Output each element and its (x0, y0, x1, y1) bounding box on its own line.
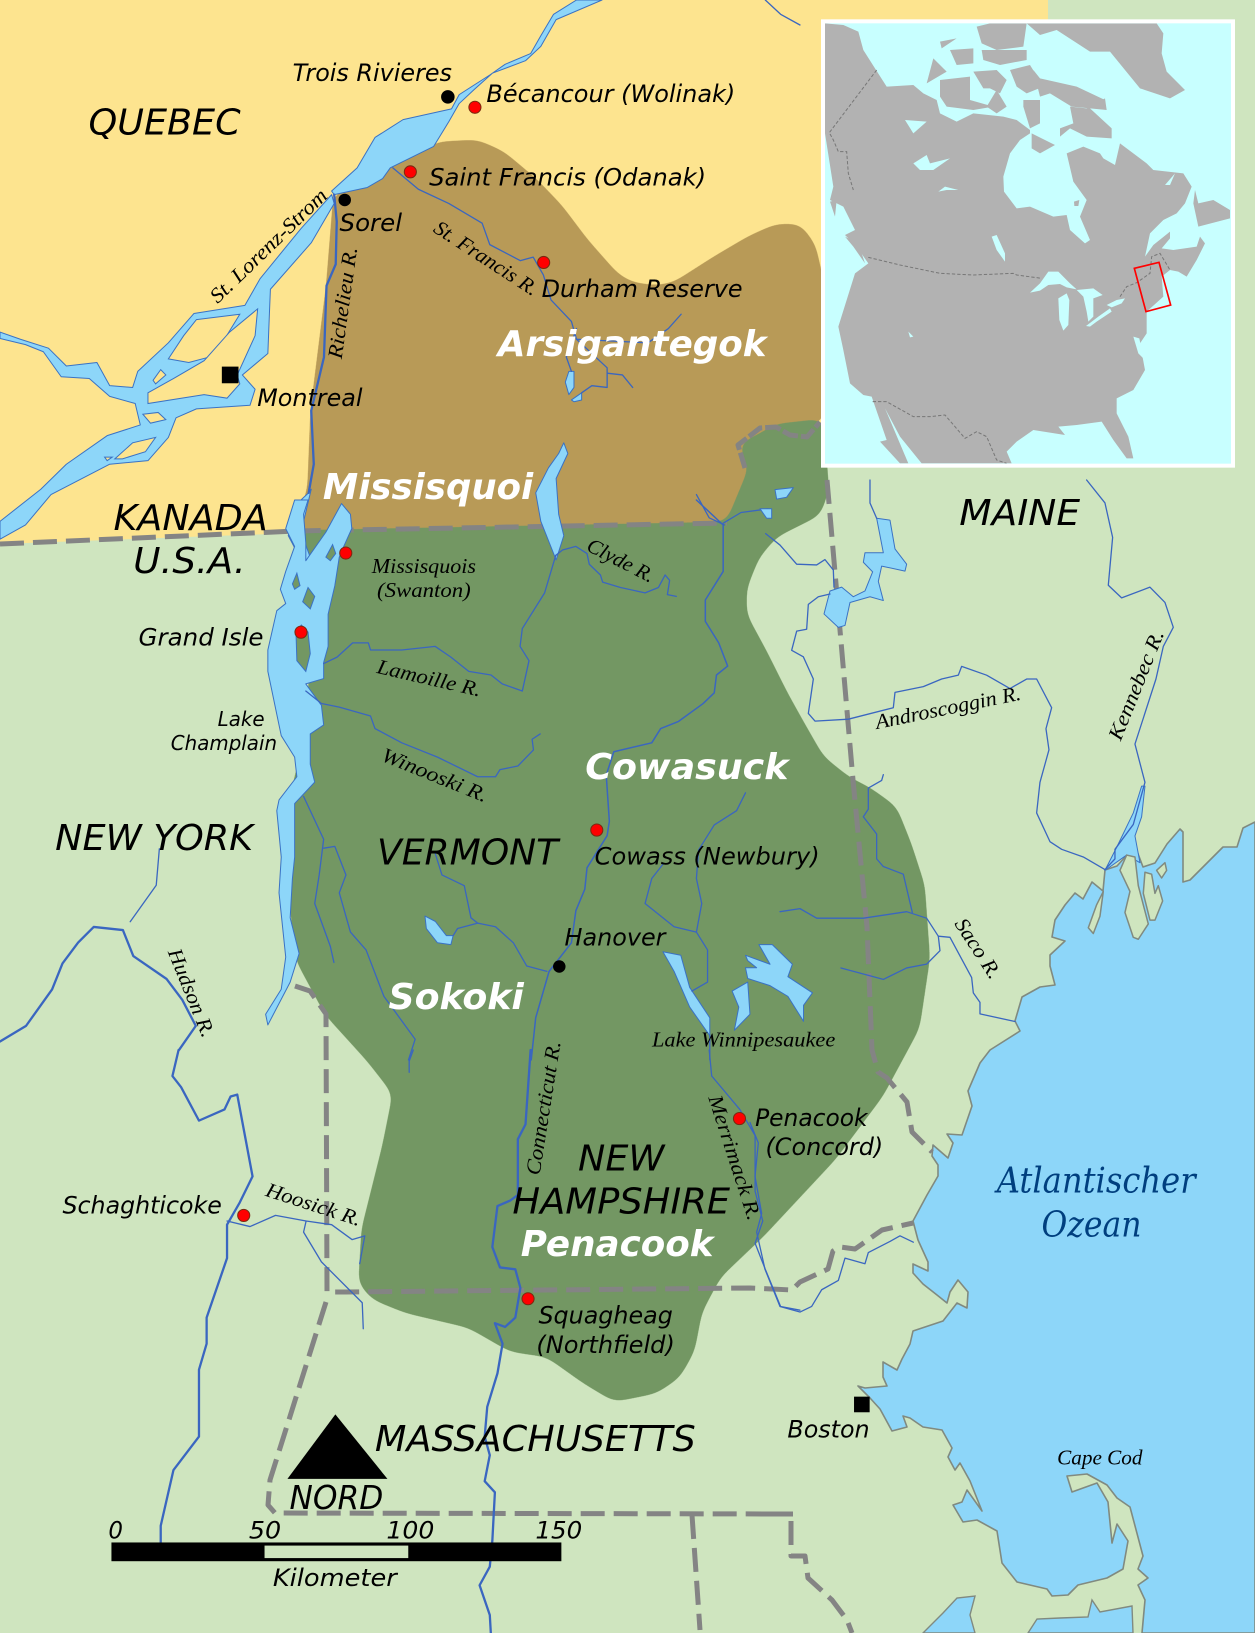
Lake Winnipesaukee (746, 945, 812, 1021)
border: Maine New Hampshire (827, 480, 932, 1152)
marker: Saint Francis (404, 166, 416, 178)
inset borders (829, 70, 1170, 463)
upper Richelieu channel (288, 489, 311, 560)
St. Lawrence upper river (332, 0, 602, 195)
Kennebec estuary (1105, 786, 1145, 870)
delta islands (105, 309, 258, 461)
label: St. Lorenz-Strom: St. Lorenz-Strom (204, 183, 332, 308)
label: Winooski R.: Winooski R. (378, 743, 492, 807)
river: lower Merrimack to coast (750, 1122, 913, 1312)
marker: Sorel (338, 194, 351, 206)
territory shapes (285, 141, 929, 1401)
label: Atlantic Ocean: Ozean (1041, 1204, 1141, 1245)
label: Hoosick R.: Hoosick R. (262, 1177, 365, 1231)
label: Lake Winnipesaukee: Lake Winnipesaukee (651, 1028, 835, 1052)
river: Richelieu (309, 195, 337, 493)
label: north: NORD (290, 1478, 383, 1517)
label: Boston: Boston (787, 1415, 870, 1443)
inset land (825, 23, 1230, 463)
Atlantic Ocean (858, 822, 1255, 1633)
Arctic islands (830, 23, 1230, 263)
region: Cowasuck: Cowasuck (585, 747, 791, 788)
marker: Montreal (222, 367, 239, 383)
region: Sokoki: Sokoki (388, 977, 525, 1018)
label: Grand Isle: Grand Isle (139, 624, 263, 652)
label: Lake Champlain: Champlain (171, 731, 277, 755)
label: Cowass: Cowass (Newbury) (595, 842, 820, 870)
scale bar: 100 (386, 1516, 434, 1544)
label: Saint Francis: Saint Francis (Odanak) (429, 163, 706, 191)
river: St. Francis (393, 0, 800, 525)
river: Androscoggin (766, 480, 1105, 870)
Maine waters (760, 480, 1173, 1022)
inset locator rectangle (1134, 262, 1171, 312)
scale bar: Kilometer (273, 1564, 399, 1592)
Vermont and New Hampshire waters (266, 500, 812, 1060)
region: Missisquoi: Missisquoi (323, 467, 534, 508)
label: Missisquois Swanton: (Swanton) (377, 578, 471, 602)
state and national borders (0, 422, 932, 1633)
label: Squagheag: Squagheag (538, 1302, 673, 1330)
river: Clyde (556, 546, 676, 596)
label: Lake Champlain: Lake (218, 707, 265, 731)
label: Missisquois Swanton (371, 554, 476, 602)
border: Canada USA (0, 523, 727, 544)
small lakes St. Francis (565, 371, 582, 402)
Montreal delta (0, 195, 334, 539)
inset lakes (905, 120, 1175, 358)
marker: Grand Isle (295, 626, 307, 638)
label: St. Francis R.: St. Francis R. (429, 215, 543, 301)
label: Durham Reserve: Durham Reserve (542, 275, 743, 303)
label: Trois Rivieres: Trois Rivieres (293, 59, 452, 87)
lake: Vermont small (425, 916, 453, 945)
river: Kennebec (1087, 480, 1173, 870)
label: Cape Cod: Cape Cod (1057, 1445, 1143, 1469)
label: Bécancour: Bécancour (Wolinak) (486, 80, 735, 108)
Narragansett inlet (923, 1596, 975, 1633)
marker: Missisquois (340, 547, 352, 559)
label: Missisquois Swanton: Missisquois (371, 554, 476, 578)
lake: Newfound (663, 952, 710, 1036)
label: New Hampshire: NEW (578, 1139, 667, 1180)
scale bar: 0 (108, 1516, 123, 1544)
region: Arsigantegok: Arsigantegok (495, 324, 769, 365)
river: small branch (409, 1050, 413, 1072)
Lake Champlain (266, 500, 352, 1025)
marker: Hanover (553, 960, 566, 973)
label: Montreal: Montreal (257, 384, 363, 412)
label: Kanada: KANADA (114, 498, 268, 539)
scale bar: 150 (535, 1516, 582, 1544)
border: Connecticut north (692, 1515, 700, 1630)
inset: North America locator (823, 21, 1233, 466)
marker: Bécancour (469, 101, 481, 113)
label: New Hampshire (512, 1139, 731, 1222)
scale bar: 50 (249, 1516, 281, 1544)
territory: Arsigantegok brown (292, 141, 823, 539)
inset frame (823, 21, 1233, 466)
label: Vermont: VERMONT (377, 832, 561, 873)
river: Hoosick (227, 1215, 365, 1329)
marker: Squagheag (522, 1293, 534, 1305)
label: Penacook Concord: Penacook (755, 1104, 869, 1132)
river: Merrimack (709, 1050, 800, 1310)
label: Atlantic Ocean (994, 1161, 1198, 1245)
region: Penacook: Penacook (521, 1224, 716, 1265)
river: upper Hudson branch (130, 849, 159, 922)
river: Lamoille (324, 555, 556, 691)
label: Squagheag: (Northfield) (536, 1331, 675, 1359)
marker: Boston (854, 1397, 870, 1412)
icon: north arrow (287, 1414, 387, 1479)
label: Richelieu R.: Richelieu R. (323, 245, 362, 361)
territory: Abenaki green (285, 420, 929, 1401)
label: Atlantic Ocean: Atlantischer (994, 1161, 1198, 1202)
label: Hudson R.: Hudson R. (163, 944, 220, 1041)
bay south of Cape Cod (1028, 1600, 1133, 1633)
Champlain islands (292, 545, 336, 671)
border: Vermont Quebec corner (738, 422, 820, 468)
river: upper Connecticut (531, 500, 728, 1060)
label: Sorel: Sorel (340, 209, 402, 237)
label: Clyde R.: Clyde R. (583, 533, 659, 587)
marker: Trois Rivieres (441, 90, 455, 104)
peninsulas (1088, 855, 1167, 939)
label: Hanover: Hanover (564, 924, 668, 952)
label: Saco R.: Saco R. (950, 913, 1007, 983)
marker: Penacook (733, 1113, 746, 1125)
label: Lake Champlain (171, 707, 277, 755)
southern rivers (161, 1050, 800, 1633)
label: Androscoggin R.: Androscoggin R. (871, 681, 1023, 734)
label: Kennebec R.: Kennebec R. (1103, 626, 1169, 744)
border: New York Massachusetts (268, 1302, 793, 1514)
label: Schaghticoke: Schaghticoke (62, 1191, 222, 1219)
label: New York: NEW YORK (55, 818, 256, 859)
land: Quebec (0, 0, 1048, 544)
label: Penacook Concord (755, 1104, 883, 1161)
river: upper Hudson (0, 927, 196, 1050)
label: Massachusetts: MASSACHUSETTS (375, 1419, 696, 1460)
lake: Squam (732, 982, 750, 1030)
Greenland (1027, 23, 1185, 98)
river: Saco (780, 775, 1015, 1022)
river: Winooski (306, 691, 540, 777)
label: Squagheag (536, 1302, 675, 1359)
Lake Memphremagog (536, 443, 568, 560)
label: USA: U.S.A. (133, 541, 246, 582)
marker: Durham (538, 256, 550, 268)
label: New Hampshire: HAMPSHIRE (512, 1181, 731, 1222)
tributaries Vermont and New Hampshire (304, 509, 768, 1060)
river: Connecticut (480, 1050, 531, 1633)
lakes: Connecticut headwaters (760, 488, 793, 518)
marker: Schaghticoke (238, 1209, 250, 1221)
scale bar (108, 1516, 582, 1592)
St. Lawrence and Quebec waters (0, 0, 800, 560)
border: Rhode Island (765, 1514, 852, 1633)
marker: Cowass (591, 824, 603, 836)
label: Maine: MAINE (959, 493, 1081, 534)
river: Hudson (161, 1050, 253, 1543)
label: Connecticut R.: Connecticut R. (521, 1039, 566, 1177)
label: Lamoille R.: Lamoille R. (374, 654, 484, 702)
label: Merrimack R.: Merrimack R. (703, 1091, 767, 1223)
Rangeley lakes (824, 518, 907, 627)
label: Quebec: QUEBEC (89, 102, 241, 143)
border: New York Vermont south (295, 986, 913, 1292)
label: Penacook Concord: (Concord) (766, 1133, 883, 1161)
